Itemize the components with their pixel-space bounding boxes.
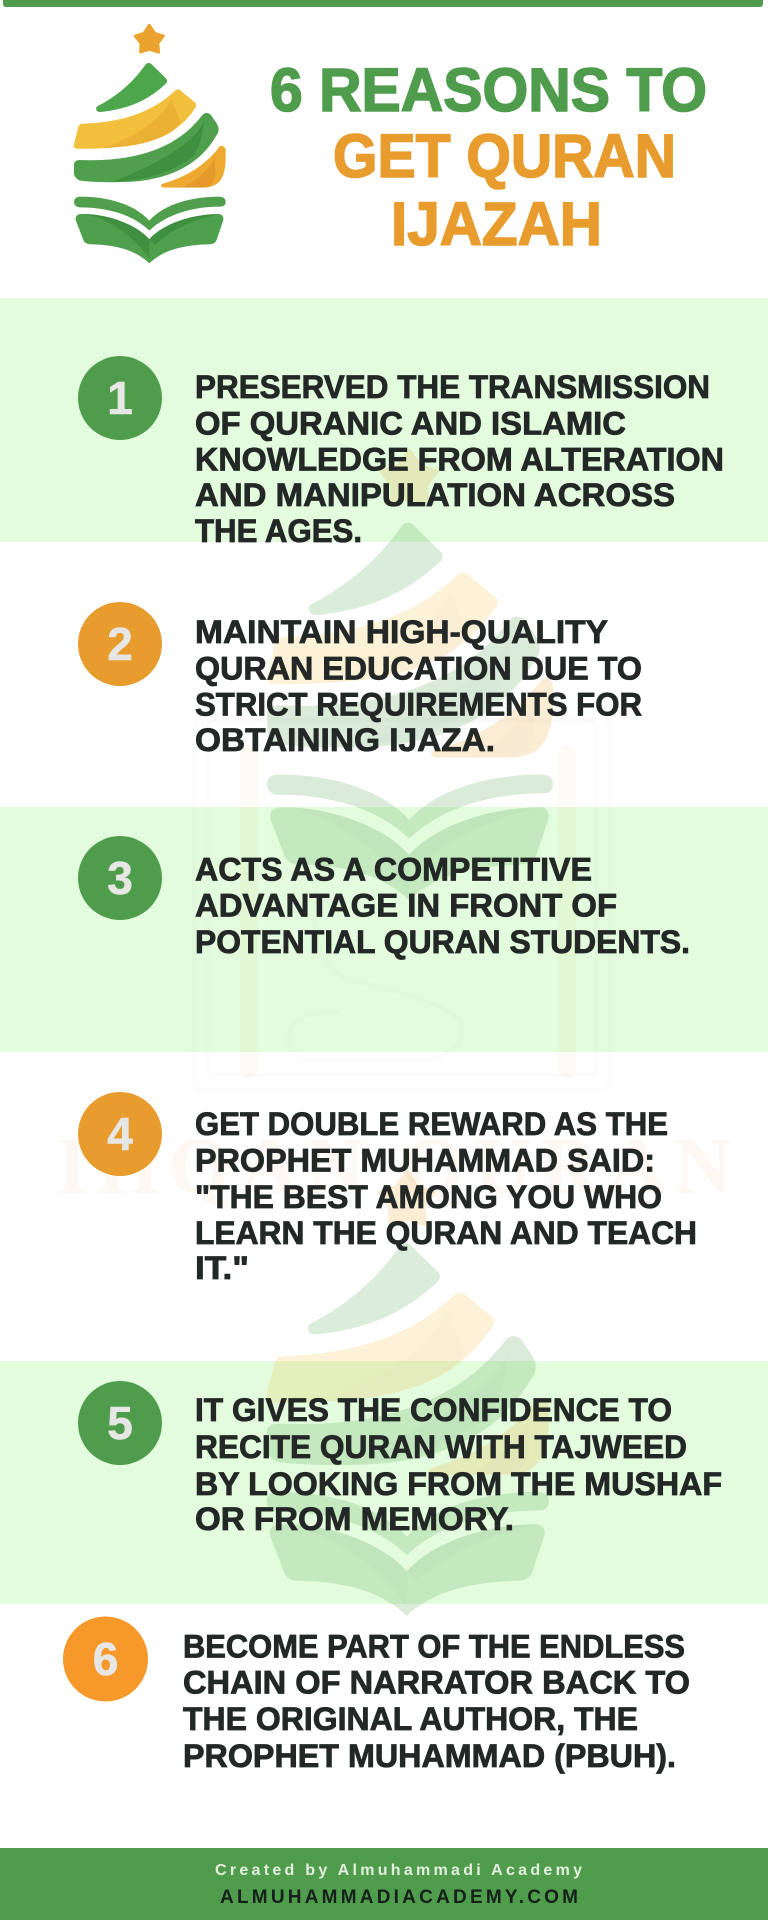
- title: GET QURAN: [333, 122, 676, 190]
- text block: reason 2: [195, 614, 642, 758]
- text block: reason 3: ACTS AS A COMPETITIVE: [195, 852, 592, 888]
- reason 6: [63, 1616, 690, 1774]
- text block: reason 1: PRESERVED THE TRANSMISSION: [195, 369, 710, 405]
- text block: reason 6: CHAIN OF NARRATOR BACK TO: [183, 1664, 690, 1700]
- reason 5: [78, 1381, 722, 1537]
- watermark: faint academy name: IHQAN QURAN: [57, 1123, 732, 1211]
- text block: reason 6: BECOME PART OF THE ENDLESS: [183, 1628, 685, 1664]
- text block: reason 1: KNOWLEDGE FROM ALTERATION: [195, 442, 724, 478]
- icon: header logo: [74, 25, 226, 263]
- text block: reason 2: MAINTAIN HIGH-QUALITY: [195, 614, 608, 650]
- footer: [0, 1848, 768, 1920]
- text block: reason 2: OBTAINING IJAZA.: [195, 722, 495, 758]
- text block: reason 4: "THE BEST AMONG YOU WHO: [195, 1179, 662, 1215]
- icon: number 3: 3: [107, 852, 133, 904]
- icon: number 4: [78, 1092, 162, 1176]
- reason 2: [78, 602, 642, 758]
- text block: reason 5: IT GIVES THE CONFIDENCE TO: [195, 1392, 672, 1428]
- text block: reason 1: AND MANIPULATION ACROSS: [195, 477, 675, 513]
- panel: band 3: [0, 807, 768, 1052]
- reason 4: [78, 1092, 697, 1286]
- icon: number 3: [78, 836, 162, 920]
- watermark: lower logo: [266, 1173, 549, 1616]
- text block: reason 6: THE ORIGINAL AUTHOR, THE: [183, 1701, 638, 1737]
- icon: number 6: [63, 1616, 148, 1702]
- text block: reason 6: PROPHET MUHAMMAD (PBUH).: [183, 1738, 676, 1774]
- panel: band 1: [0, 298, 768, 542]
- icon: number 5: 5: [107, 1397, 133, 1449]
- reason 1: [78, 356, 724, 549]
- text block: reason 4: [195, 1106, 697, 1286]
- text block: reason 3: ADVANTAGE IN FRONT OF: [195, 888, 617, 924]
- text block: reason 3: [195, 852, 690, 960]
- watermark: faint frame and pillars: [194, 720, 610, 1090]
- icon: number 6: 6: [93, 1633, 118, 1685]
- title: IJAZAH: [391, 190, 602, 258]
- icon: number 1: [78, 356, 162, 440]
- footer website: ALMUHAMMADIACADEMY.COM: [220, 1887, 578, 1908]
- icon: number 4: 4: [107, 1108, 133, 1160]
- text block: reason 4: LEARN THE QURAN AND TEACH: [195, 1215, 697, 1251]
- text block: reason 3: POTENTIAL QURAN STUDENTS.: [195, 924, 690, 960]
- footer credit: Created by Almuhammadi Academy: [215, 1862, 582, 1879]
- text block: reason 4: IT.": [195, 1250, 249, 1286]
- icon: number 1: 1: [107, 372, 133, 424]
- text block: reason 2: QURAN EDUCATION DUE TO: [195, 650, 642, 686]
- text block: reason 5: BY LOOKING FROM THE MUSHAF: [195, 1466, 722, 1502]
- reason 3: [78, 836, 690, 960]
- text block: reason 2: STRICT REQUIREMENTS FOR: [195, 686, 642, 722]
- top green bar: [3, 0, 763, 7]
- icon: number 2: [78, 602, 162, 686]
- panel: band 5: [0, 1361, 768, 1604]
- text block: reason 5: RECITE QURAN WITH TAJWEED: [195, 1429, 687, 1465]
- text block: reason 1: [195, 369, 724, 549]
- text block: reason 4: PROPHET MUHAMMAD SAID:: [195, 1142, 655, 1178]
- text block: reason 1: THE AGES.: [195, 513, 362, 549]
- title: [270, 56, 707, 258]
- icon: number 2: 2: [107, 618, 133, 670]
- text block: reason 1: OF QURANIC AND ISLAMIC: [195, 406, 626, 442]
- text block: reason 6: [183, 1628, 690, 1774]
- text block: reason 4: GET DOUBLE REWARD AS THE: [195, 1106, 668, 1142]
- text block: reason 5: [195, 1392, 722, 1537]
- watermark: upper logo: [266, 452, 553, 900]
- text block: reason 5: OR FROM MEMORY.: [195, 1501, 514, 1537]
- title: 6 REASONS TO: [270, 56, 707, 124]
- icon: number 5: [78, 1381, 162, 1465]
